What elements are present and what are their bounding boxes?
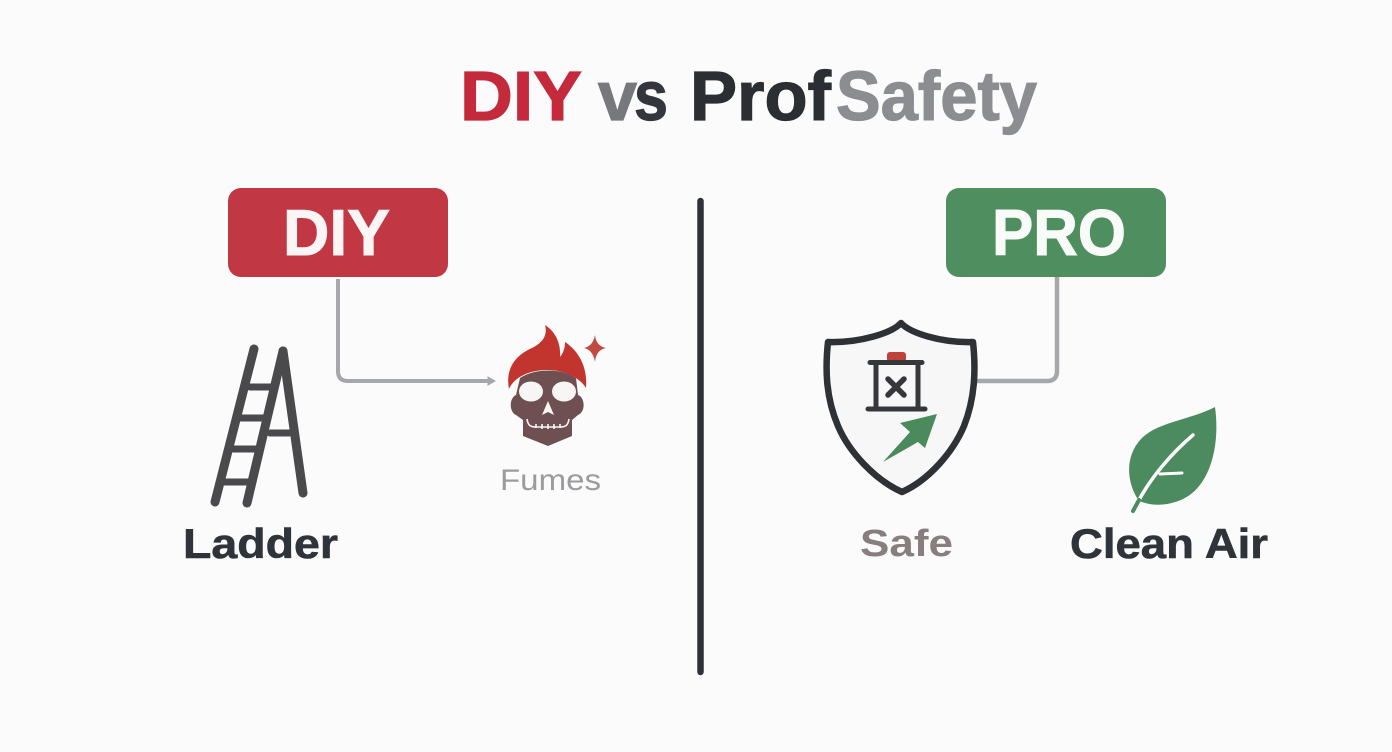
shield outline — [827, 323, 974, 492]
label: Fumes: Fumes — [500, 464, 601, 497]
title: v — [598, 57, 637, 135]
title: DIY — [460, 57, 582, 135]
PRO badge: PRO — [992, 196, 1126, 269]
label: Clean Air: Clean Air — [1070, 520, 1268, 567]
nose — [542, 401, 554, 415]
title: s — [634, 57, 668, 135]
icon: ladder — [215, 349, 303, 503]
label: Ladder: Ladder — [183, 520, 338, 567]
DIY badge: DIY — [283, 196, 390, 269]
eyes — [519, 382, 543, 402]
title — [460, 57, 1037, 135]
DIY badge — [228, 188, 448, 277]
title: Prof — [690, 57, 832, 135]
skull — [511, 370, 584, 446]
PRO connector line — [976, 277, 1057, 381]
PRO badge — [946, 188, 1166, 277]
container — [868, 362, 925, 409]
icon: safety shield — [827, 323, 974, 492]
cross — [888, 379, 904, 395]
label: Safe: Safe — [860, 523, 953, 565]
flame — [508, 325, 586, 389]
red cap — [887, 352, 906, 362]
teeth — [527, 419, 569, 429]
DIY connector arrow — [338, 279, 495, 385]
icon: leaf — [1129, 407, 1216, 511]
divider line — [697, 201, 704, 672]
sparkle — [584, 335, 606, 362]
title: Safety — [836, 57, 1037, 135]
icon: skull with flame — [508, 325, 606, 446]
green arrow — [883, 414, 937, 462]
